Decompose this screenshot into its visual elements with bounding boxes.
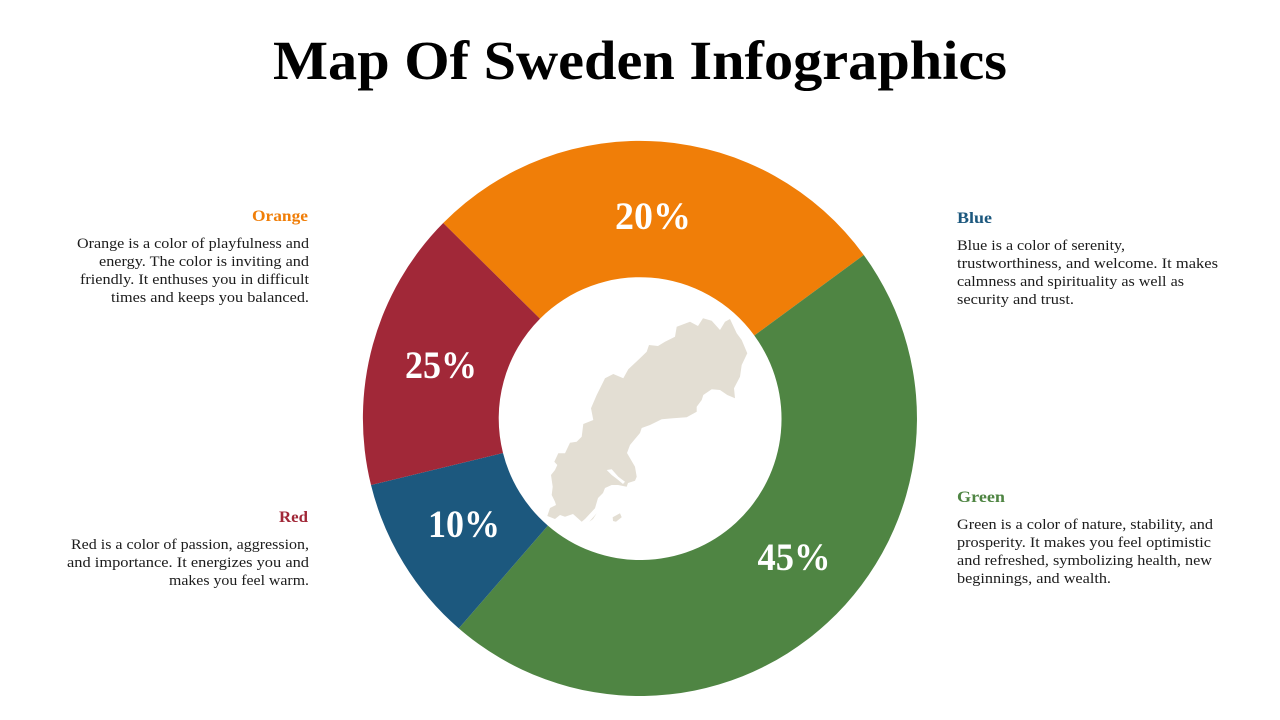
label: 25%: 25%: [405, 344, 477, 387]
body: blue: calmness and spirituality as well as: [957, 274, 1184, 290]
body: red: Red is a color of passion, aggression,: [71, 537, 309, 553]
text block: orange: [77, 208, 310, 306]
body: blue: trustworthiness, and welcome. It makes: [957, 256, 1218, 272]
body: red: and importance. It energizes you and: [67, 555, 310, 571]
text block: green: [957, 489, 1214, 587]
segment: orange 20%: [443, 141, 864, 336]
body: green: beginnings, and wealth.: [957, 571, 1111, 587]
body: blue: [957, 238, 1218, 308]
heading: green: Green: [957, 489, 1005, 506]
body: orange: friendly. It enthuses you in difficult: [80, 272, 310, 288]
text block: blue: [957, 210, 1218, 308]
body: red: [67, 537, 310, 589]
label: 45%: 45%: [758, 536, 830, 579]
segment: red 25%: [363, 223, 540, 485]
body: green: prosperity. It makes you feel optimistic: [957, 535, 1211, 551]
body: red: makes you feel warm.: [169, 573, 309, 589]
body: orange: energy. The color is inviting and: [99, 254, 310, 270]
icon: map of Sweden: [547, 318, 747, 522]
heading: orange: Orange: [252, 208, 308, 225]
body: orange: Orange is a color of playfulness and: [77, 236, 310, 252]
body: green: and refreshed, symbolizing health, new: [957, 553, 1212, 569]
body: blue: security and trust.: [957, 292, 1074, 308]
text block: red: [67, 509, 310, 589]
donut chart: [363, 141, 917, 696]
body: green: Green is a color of nature, stability, and: [957, 517, 1214, 533]
heading: red: Red: [279, 509, 308, 526]
body: orange: times and keeps you balanced.: [111, 290, 309, 306]
body: green: [957, 517, 1214, 587]
title: Map Of Sweden Infographics: [273, 30, 1007, 91]
body: orange: [77, 236, 310, 306]
label: 20%: 20%: [615, 195, 691, 238]
body: blue: Blue is a color of serenity,: [957, 238, 1125, 254]
heading: blue: Blue: [957, 210, 992, 227]
segment: green 45%: [459, 255, 917, 696]
segment: blue 10%: [371, 453, 548, 628]
label: 10%: 10%: [428, 503, 500, 546]
